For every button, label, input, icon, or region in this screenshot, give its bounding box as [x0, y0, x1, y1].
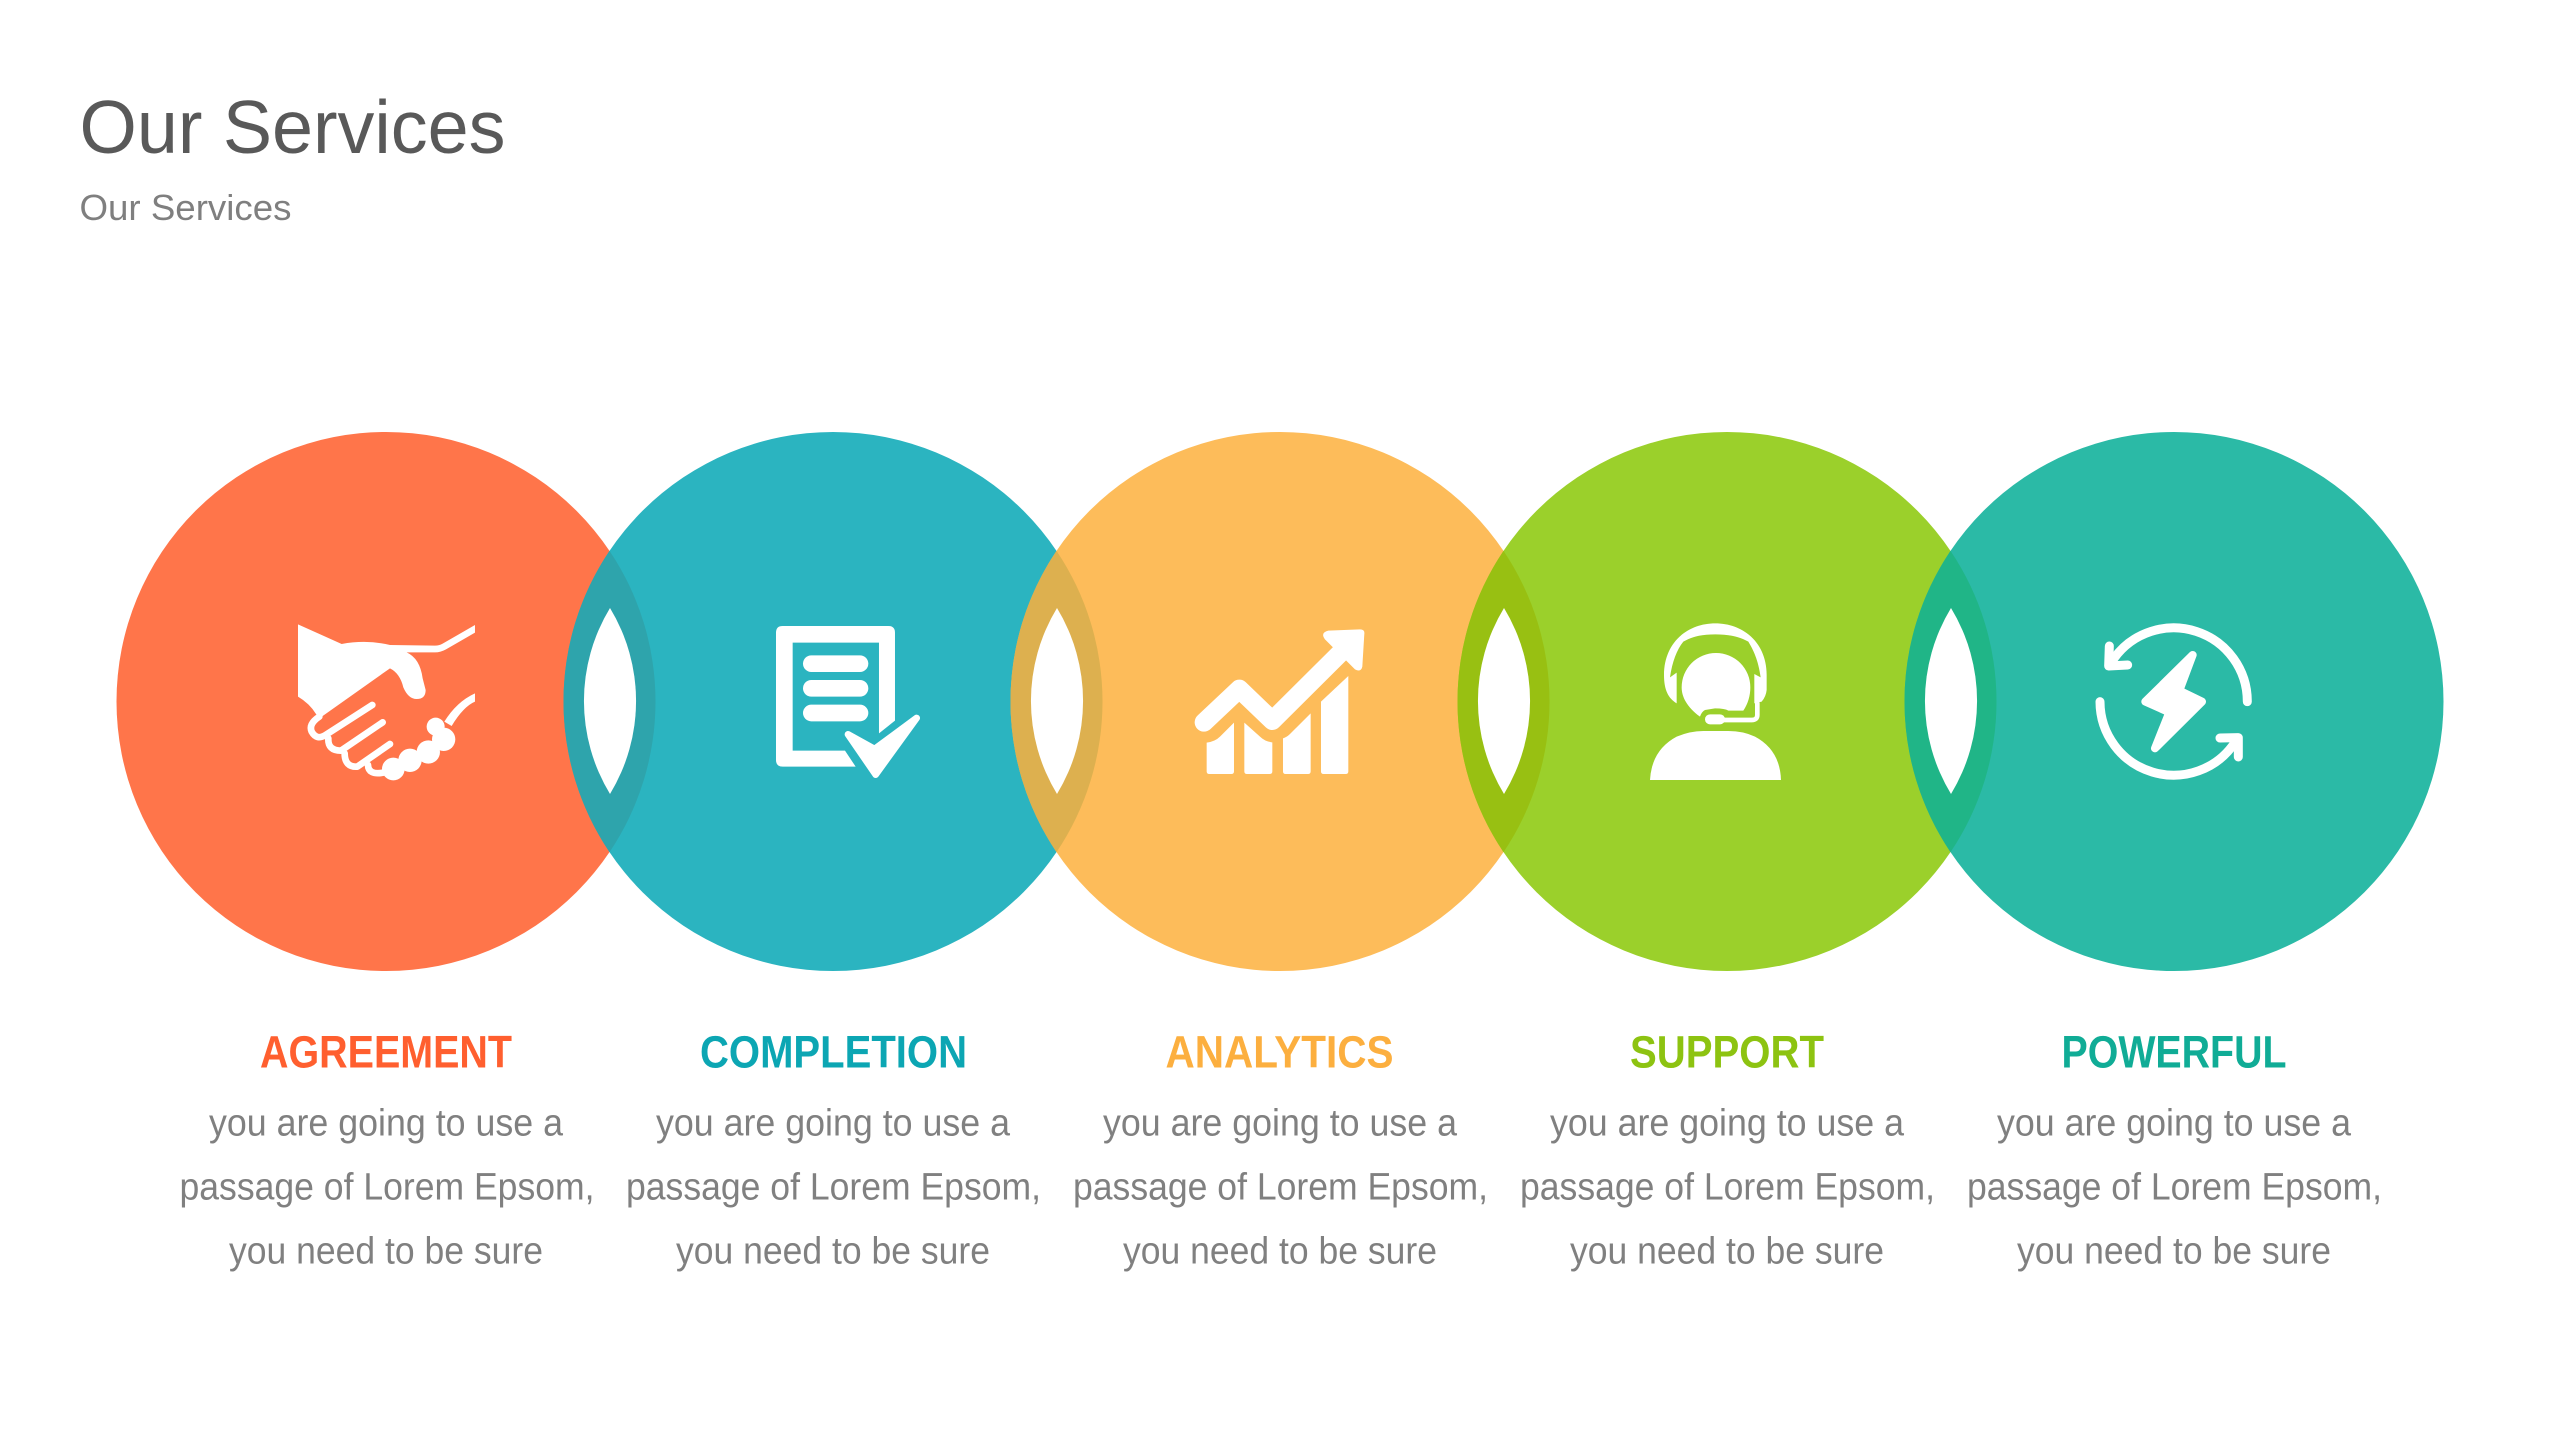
heading: completion: COMPLETION	[700, 1026, 967, 1078]
text block: completion: you need to be sure	[676, 1230, 990, 1272]
overlap: analytics and support	[1457, 551, 1550, 852]
panel: analytics	[1010, 432, 1550, 1272]
text block: analytics: passage of Lorem Epsom,	[1073, 1166, 1488, 1208]
icon: handshake	[298, 624, 475, 780]
text block: powerful: you are going to use a	[1997, 1102, 2352, 1144]
text block: agreement	[180, 1102, 594, 1272]
text block: powerful: you need to be sure	[2017, 1230, 2331, 1272]
text block: completion: passage of Lorem Epsom,	[626, 1166, 1041, 1208]
circle: completion	[564, 432, 1102, 971]
text block: support: you are going to use a	[1550, 1102, 1905, 1144]
icon: growth chart	[1204, 629, 1364, 774]
panel: completion	[564, 432, 1102, 1272]
heading: agreement: AGREEMENT	[260, 1026, 512, 1078]
icon: headset agent	[1650, 623, 1781, 780]
heading: support: SUPPORT	[1630, 1026, 1824, 1078]
text block: support: passage of Lorem Epsom,	[1520, 1166, 1935, 1208]
circle: powerful	[1904, 432, 2444, 971]
text block: completion	[626, 1102, 1041, 1272]
circle: support	[1458, 432, 1996, 971]
text block: completion: you are going to use a	[656, 1102, 1011, 1144]
text block: powerful: passage of Lorem Epsom,	[1967, 1166, 2382, 1208]
text block: powerful	[1967, 1102, 2382, 1272]
icon: document with check	[776, 626, 917, 775]
panel: support	[1458, 432, 1996, 1272]
text block: agreement: passage of Lorem Epsom,	[180, 1166, 594, 1208]
title: Our Services	[80, 85, 506, 169]
circle: agreement	[116, 432, 656, 971]
text block: support: you need to be sure	[1570, 1230, 1884, 1272]
text block: agreement: you are going to use a	[209, 1102, 564, 1144]
text block: analytics: you need to be sure	[1123, 1230, 1437, 1272]
text block: support	[1520, 1102, 1935, 1272]
overlap: support and powerful	[1904, 551, 1997, 852]
text block: analytics: you are going to use a	[1103, 1102, 1458, 1144]
overlap: completion and analytics	[1010, 551, 1103, 852]
subtitle: Our Services	[80, 187, 292, 228]
panel: agreement	[116, 432, 656, 1272]
circle: analytics	[1010, 432, 1550, 971]
heading: analytics: ANALYTICS	[1166, 1026, 1394, 1078]
text block: analytics	[1073, 1102, 1488, 1272]
text block: agreement: you need to be sure	[229, 1230, 543, 1272]
icon: power cycle	[2100, 628, 2247, 775]
overlap: agreement and completion	[563, 551, 656, 852]
heading: powerful: POWERFUL	[2062, 1026, 2286, 1078]
panel: powerful	[1904, 432, 2444, 1272]
